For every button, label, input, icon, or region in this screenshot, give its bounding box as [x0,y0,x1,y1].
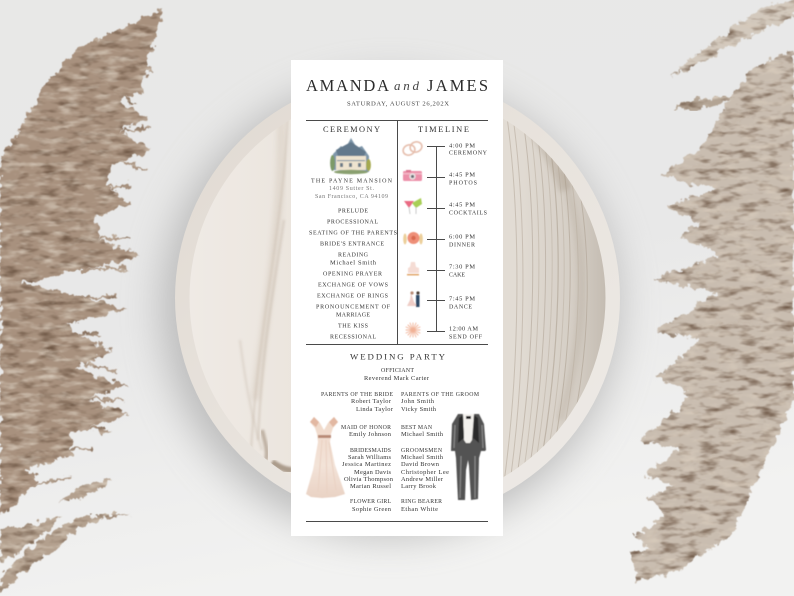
groom side names: Christopher Lee [401,469,449,476]
groom side names: Ethan White [401,506,438,513]
icon: mansion [330,138,371,174]
timeline labels: COCKTAILS [449,210,487,216]
right pampas grass [630,0,794,582]
title: AMANDA [306,76,389,95]
timeline axis [427,146,445,332]
right frond top wisp [670,0,794,78]
icon: cake [407,262,419,275]
bride side names: Sophie Green [352,506,392,513]
ceremony order list: PRELUDE [338,208,368,214]
right frond thin tip [673,97,735,110]
date: SATURDAY, AUGUST 26,202X [347,100,449,108]
bride side names: FLOWER GIRL [350,499,391,505]
illustration: black tuxedo [451,414,486,500]
timeline labels: 7:45 PM [449,295,475,302]
bride side names: Megan Davis [354,469,392,476]
section dividers [306,120,488,522]
timeline labels: 6:00 PM [449,233,475,240]
bride side names: Jessica Martinez [342,461,391,468]
bride side names: Robert Taylor [351,398,392,405]
ceremony order list: BRIDE'S ENTRANCE [320,241,384,247]
ceremony order list: MARRIAGE [336,312,370,318]
plate shadow [162,80,618,536]
right frond body [630,50,794,582]
ceremony order list: RECESSIONAL [330,334,376,340]
icon: dinner plate [403,232,423,244]
left pampas grass [0,9,163,594]
title [306,76,488,95]
bride side names [321,392,394,513]
title: and [394,78,420,93]
timeline labels [449,142,488,340]
timeline labels: 12:00 AM [449,325,478,332]
officiant [364,368,430,382]
bride side names: Linda Taylor [356,406,394,413]
right frond fringe [645,105,765,575]
groom side names: Vicky Smith [401,406,437,413]
venue: 1409 Sutter St. [329,186,374,192]
heading: timeline: TIMELINE [418,125,469,134]
timeline labels: SEND OFF [449,334,483,340]
title: JAMES [427,76,488,95]
icon: camera [403,170,422,181]
ceremony order list: EXCHANGE OF VOWS [318,282,388,288]
wooden plate [175,102,620,494]
timeline labels: 7:30 PM [449,263,475,270]
timeline labels: DANCE [449,304,472,310]
bride side names: BRIDESMAIDS [350,448,391,454]
groom side names: PARENTS OF THE GROOM [401,392,479,398]
groom side names: Andrew Miller [401,476,444,483]
icon: rings [402,140,423,157]
timeline labels: 4:45 PM [449,171,475,178]
groom side names: RING BEARER [401,499,442,505]
timeline labels: 4:00 PM [449,142,475,149]
program card [291,60,503,536]
heading: ceremony: CEREMONY [323,125,380,134]
bride side names: Sarah Williams [348,454,392,461]
ceremony order list: EXCHANGE OF RINGS [317,293,388,299]
left frond body [0,9,163,515]
ceremony order list: OPENING PRAYER [323,271,382,277]
icon: sparkler fireworks [406,323,420,337]
groom side names: David Brown [401,461,440,468]
ceremony order list: THE KISS [338,323,368,329]
groom side names: John Smith [401,398,435,405]
ceremony order list: PROCESSIONAL [327,219,378,225]
timeline labels: CEREMONY [449,150,488,156]
icon: cocktails [404,198,422,214]
bride side names: Olivia Thompson [344,476,394,483]
timeline labels: DINNER [449,242,475,248]
illustration: bridal dress [306,417,345,498]
venue: THE PAYNE MANSION [311,178,393,184]
bride side names: Emily Johnson [349,431,392,438]
bride side names: MAID OF HONOR [341,425,391,431]
heading: wedding party: WEDDING PARTY [350,352,446,362]
ceremony order list: PRONOUNCEMENT OF [316,304,391,310]
ceremony order list: Michael Smith [330,259,377,266]
groom side names: GROOMSMEN [401,448,443,454]
timeline labels: 4:45 PM [449,201,475,208]
icon: dancing couple [407,291,420,307]
groom side names: Michael Smith [401,431,444,438]
venue: San Francisco, CA 94109 [315,194,388,200]
bride side names: PARENTS OF THE BRIDE [321,392,393,398]
groom side names: Larry Brook [401,483,437,490]
officiant: Reverend Mark Carter [364,375,430,382]
ceremony order list: READING [338,252,369,258]
ceremony order list: SEATING OF THE PARENTS [309,230,397,236]
groom side names: BEST MAN [401,425,433,431]
groom side names [401,392,479,513]
left frond lower strands [0,479,130,594]
timeline labels: PHOTOS [449,180,477,186]
groom side names: Michael Smith [401,454,444,461]
bride side names: Marian Russel [350,483,391,490]
timeline labels: CAKE [449,272,465,278]
venue [311,178,393,200]
officiant: OFFICIANT [381,368,414,374]
left frond fringe [10,60,150,490]
ceremony order list [309,208,397,340]
